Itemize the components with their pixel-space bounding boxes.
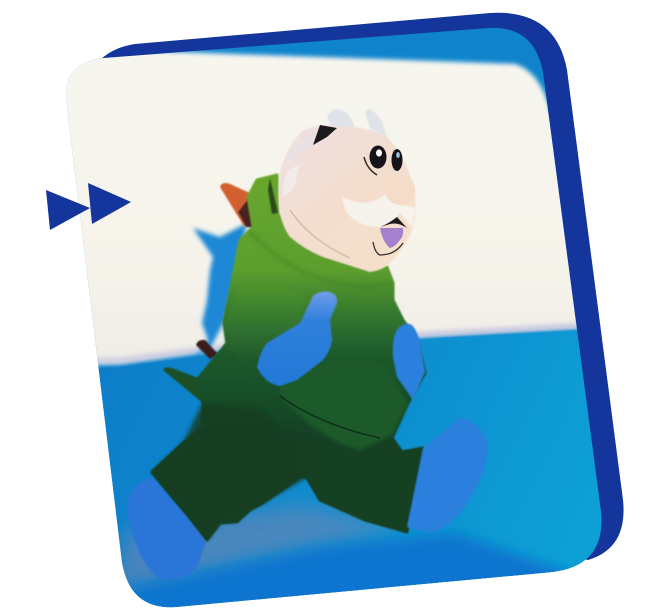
- character: nose: [385, 175, 415, 205]
- character: front trouser: [305, 438, 423, 532]
- character: tail tip: [196, 340, 218, 359]
- arrow 2: [88, 183, 131, 224]
- character: tail: [163, 367, 204, 404]
- double arrow icon: [46, 183, 131, 230]
- character: eyes: [370, 146, 402, 171]
- character: hood inner shadow: [268, 178, 278, 214]
- character: belly pocket: [280, 360, 408, 450]
- photo: character shadow on wall: [193, 223, 247, 358]
- character: head: [278, 125, 416, 272]
- character: pocket seam: [280, 396, 380, 438]
- character: back spike: [220, 183, 258, 228]
- character: near hand: [257, 292, 337, 386]
- character: hood shading: [250, 232, 392, 287]
- dark blue backing card: [95, 13, 624, 560]
- arrow 1: [46, 190, 90, 230]
- character: back foot: [128, 477, 206, 579]
- photo: floor: [98, 330, 602, 608]
- character: smile line: [373, 242, 403, 255]
- character: body silhouette: [152, 175, 425, 540]
- character: hair top: [285, 130, 318, 165]
- character: moustache: [342, 193, 415, 228]
- photo panel: [66, 28, 602, 608]
- character: leg shading: [152, 404, 303, 540]
- character: hair tuft: [313, 125, 337, 145]
- photo: floor shadow band: [115, 505, 410, 590]
- character: hair: [283, 165, 300, 197]
- photo: wall bottom lilac glow: [40, 323, 620, 362]
- character: plush toy: [128, 109, 488, 579]
- character: far hand: [393, 324, 425, 400]
- character: black moustache: [380, 217, 407, 228]
- character: eyelash line: [364, 157, 377, 175]
- character: head seam: [290, 210, 350, 258]
- character: arm sleeve: [224, 286, 305, 375]
- photo: cream wall: [66, 50, 577, 368]
- character: front foot: [407, 418, 488, 533]
- character: mouth: [380, 228, 403, 248]
- character: ears: [327, 109, 387, 138]
- photo: foreground floor: [125, 533, 620, 610]
